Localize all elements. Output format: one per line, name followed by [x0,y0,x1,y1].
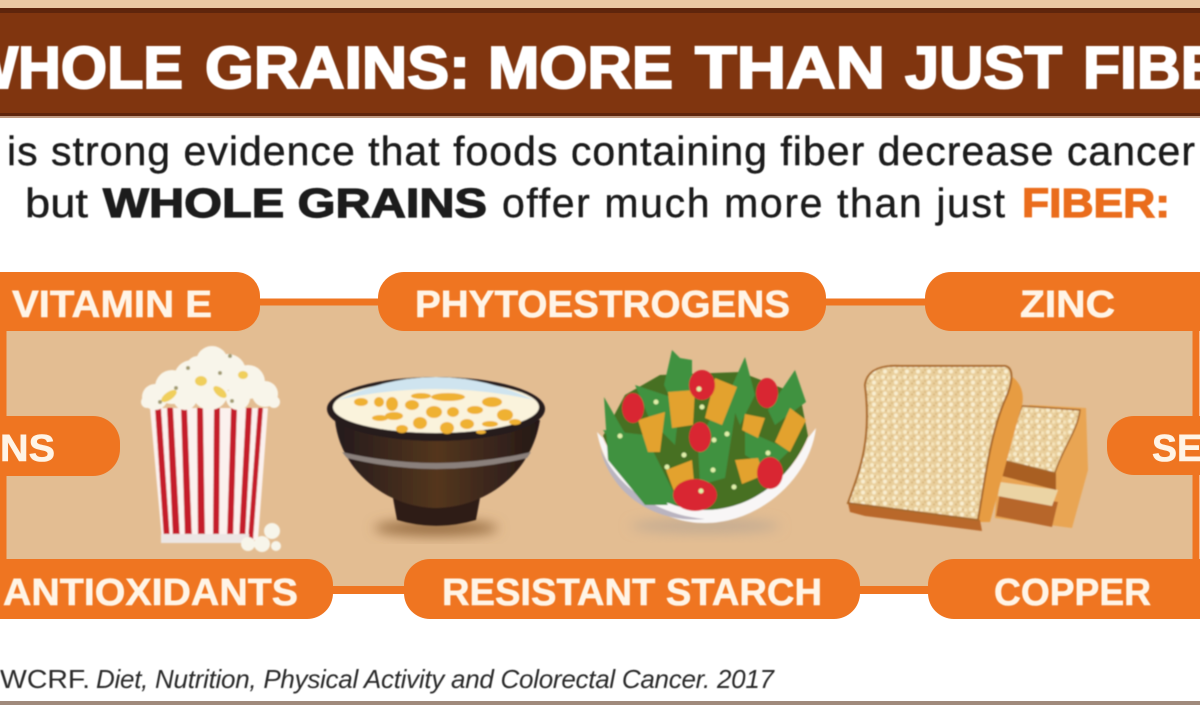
title: THAN [695,35,885,101]
pill: resistant starch: RESISTANT STARCH [442,572,822,614]
title [0,35,1200,101]
title: JUST [905,35,1062,101]
pill: left cropped [0,416,120,476]
source citation: WCRF. [0,664,90,694]
intro text line 2: FIBER: [1022,180,1170,226]
intro text line 2 [25,180,1170,226]
pill: resistant starch [404,559,860,619]
title: GRAINS: [205,35,470,101]
header band [0,0,1200,118]
icon: cereal bowl [327,377,545,536]
title: MORE [488,35,673,101]
pill: left cropped: NS [0,428,55,470]
pill: vitamin E [0,272,260,331]
footer rule [0,701,1200,705]
intro text line 2: offer much more than just [502,180,1006,226]
icon: salad bowl [597,350,816,533]
pill: antioxidants [0,559,333,619]
intro text line 1: is strong evidence that foods containing fiber decrease cancer [7,128,1195,174]
icon: popcorn [141,346,281,552]
pill: right cropped [1107,416,1200,475]
pill: antioxidants: ANTIOXIDANTS [3,572,298,614]
intro text line 2: WHOLE GRAINS [103,180,487,226]
pill: zinc [925,272,1200,331]
icon: bread slices [848,366,1088,531]
pill: phytoestrogens: PHYTOESTROGENS [415,284,790,326]
pill: zinc: ZINC [1020,284,1115,326]
tan panel [0,302,1200,624]
pill: copper [928,559,1200,619]
pill: copper: COPPER [994,572,1151,614]
intro text line 2: but [25,180,89,226]
pill: phytoestrogens [378,272,826,331]
source citation: Diet, Nutrition, Physical Activity and Colorectal Cancer. 2017 [96,664,776,694]
pill: vitamin E: VITAMIN E [12,284,212,326]
